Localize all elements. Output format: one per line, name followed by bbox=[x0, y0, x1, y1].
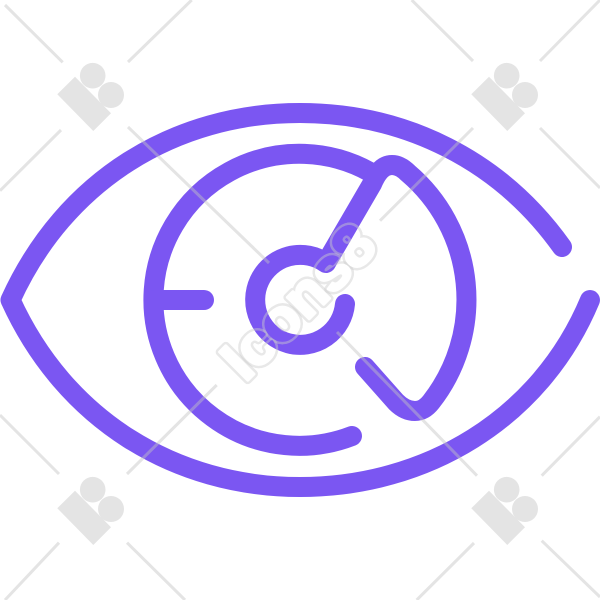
eyelid outline bbox=[10, 113, 590, 487]
watermark: logo top right bbox=[471, 63, 538, 131]
iris tick bbox=[154, 290, 204, 310]
icon: eye bbox=[10, 113, 590, 487]
watermark: logo top left bbox=[57, 63, 124, 131]
watermark: logo bottom left bbox=[57, 477, 124, 545]
iris arc bbox=[153, 154, 370, 446]
watermark: Icons8 wordmark: Icons8 bbox=[208, 212, 389, 392]
watermark: logo bottom right bbox=[471, 477, 538, 545]
pupil with connector and iris outer edge bbox=[255, 165, 466, 411]
